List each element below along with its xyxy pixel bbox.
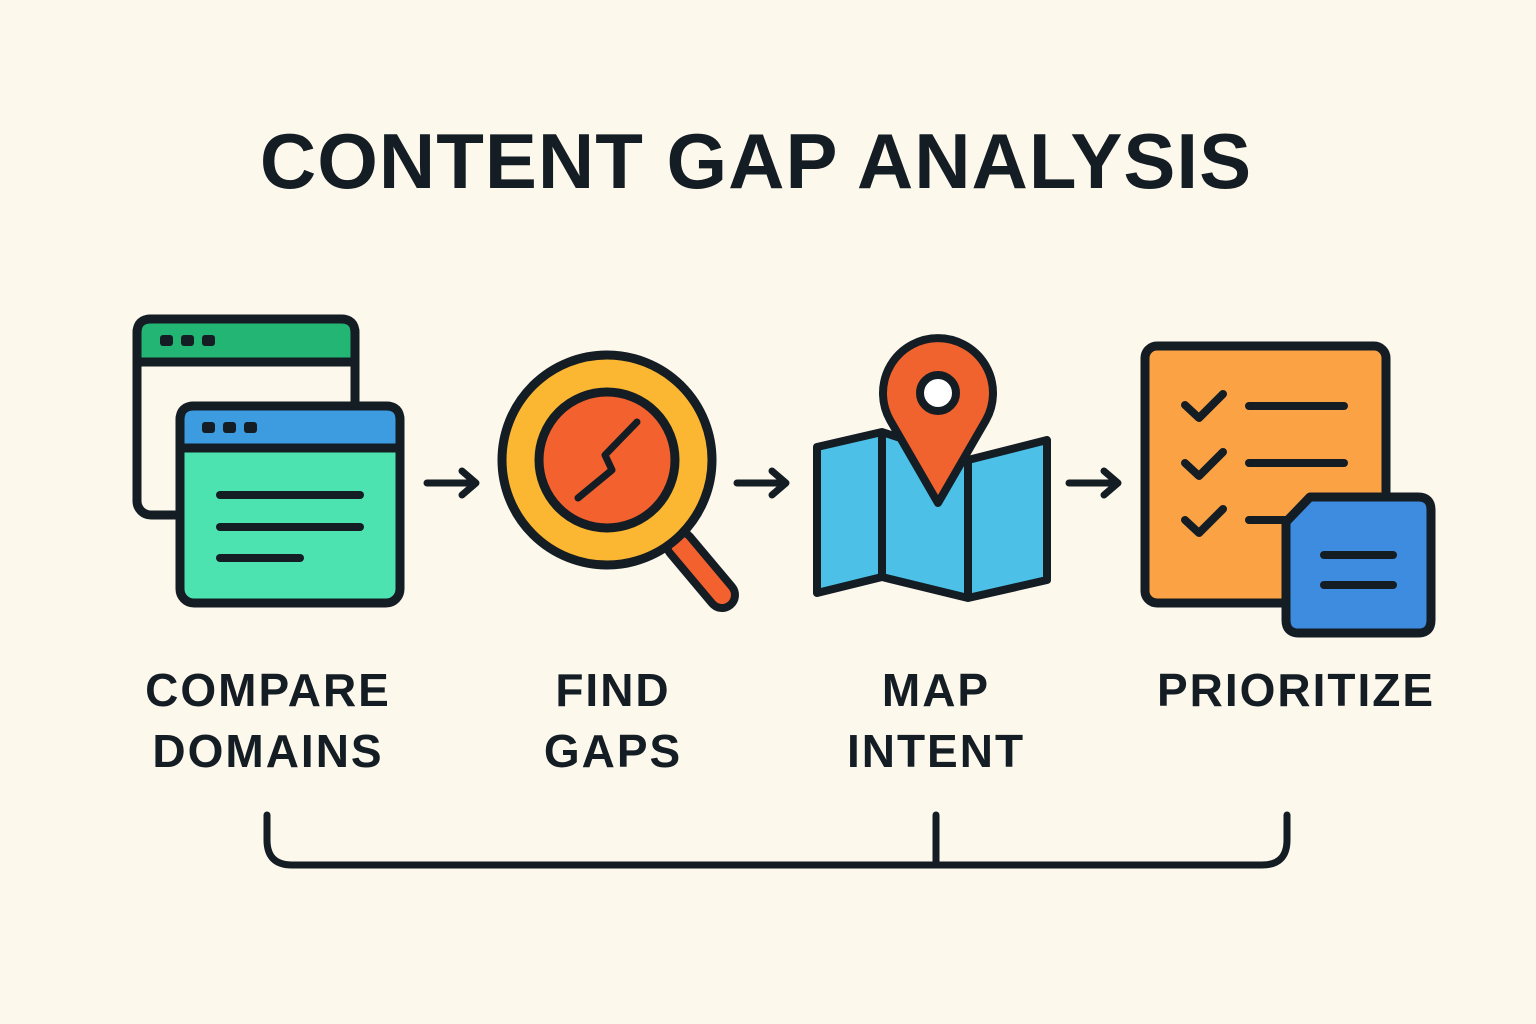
label: compare domains: DOMAINS: [152, 725, 384, 777]
label: find gaps: FIND: [555, 664, 671, 716]
label: compare domains: [145, 664, 391, 777]
icon: checklist: [1145, 346, 1431, 633]
label: compare domains: COMPARE: [145, 664, 391, 716]
arrow 1: [427, 471, 476, 495]
arrow 2: [737, 471, 786, 495]
title: CONTENT GAP ANALYSIS: [260, 117, 1252, 205]
label: find gaps: GAPS: [544, 725, 682, 777]
label: map intent: [847, 664, 1025, 777]
label: map intent: MAP: [882, 664, 990, 716]
icon: magnifier: [502, 355, 722, 595]
label: prioritize: PRIORITIZE: [1157, 664, 1435, 716]
icon: browser windows: [137, 319, 400, 603]
bracket: [267, 815, 1287, 865]
icon: map with pin: [817, 338, 1047, 598]
label: map intent: INTENT: [847, 725, 1025, 777]
label: find gaps: [544, 664, 682, 777]
arrow 3: [1069, 471, 1118, 495]
